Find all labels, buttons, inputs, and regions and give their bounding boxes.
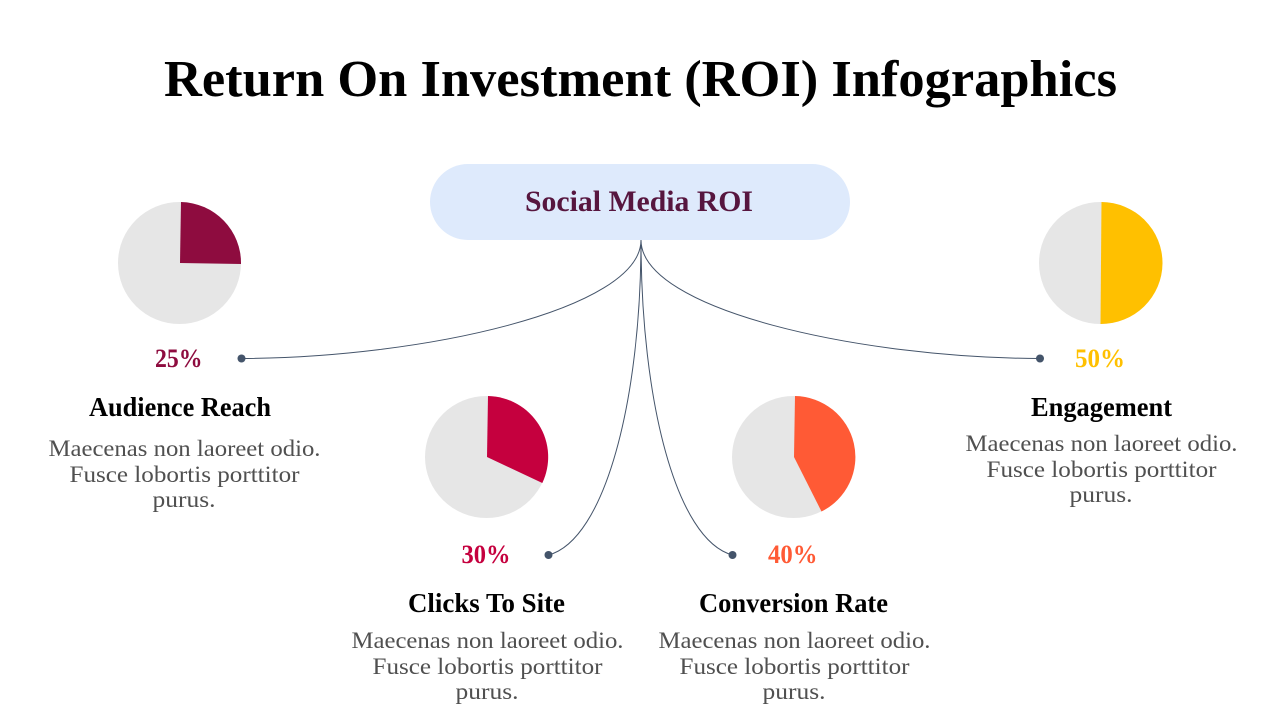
heading: Clicks To Site: Clicks To Site: [408, 588, 565, 618]
body text: [966, 431, 1238, 507]
panel: conversion rate: [658, 396, 930, 704]
heading: Engagement: Engagement: [1031, 392, 1172, 422]
pie chart: 25%: [118, 202, 241, 324]
body text: purus.: [152, 487, 216, 512]
value: 25%: 25%: [155, 344, 202, 373]
title: Return On Investment (ROI) Infographics: [164, 51, 1117, 108]
body text: Maecenas non laoreet odio.: [48, 436, 320, 461]
value: 50%: 50%: [1075, 344, 1125, 373]
panel: clicks to site: [352, 396, 624, 704]
panel: engagement: [966, 202, 1238, 507]
pie chart: 30%: [425, 396, 548, 518]
body text: [658, 628, 930, 704]
value: 30%: 30%: [462, 540, 510, 569]
body text: purus.: [456, 679, 518, 704]
body text: [352, 628, 624, 704]
heading: Conversion Rate: Conversion Rate: [699, 588, 888, 618]
body text: Fusce lobortis porttitor: [680, 654, 910, 679]
body text: purus.: [762, 679, 826, 704]
body text: Maecenas non laoreet odio.: [352, 628, 624, 653]
central pill: Social Media ROI: Social Media ROI: [525, 185, 753, 218]
central pill: Social Media ROI: [430, 164, 850, 240]
value: 40%: 40%: [768, 540, 818, 569]
body text: [48, 436, 320, 512]
body text: Fusce lobortis porttitor: [70, 462, 300, 487]
body text: Maecenas non laoreet odio.: [966, 431, 1238, 456]
pie chart: 50%: [1039, 202, 1163, 324]
heading: Audience Reach: Audience Reach: [89, 392, 271, 422]
panel: audience reach: [48, 202, 320, 512]
pie chart: 40%: [732, 396, 855, 518]
body text: purus.: [1070, 482, 1132, 507]
body text: Maecenas non laoreet odio.: [658, 628, 930, 653]
body text: Fusce lobortis porttitor: [372, 654, 603, 679]
connector lines: [238, 240, 1044, 559]
body text: Fusce lobortis porttitor: [986, 457, 1217, 482]
